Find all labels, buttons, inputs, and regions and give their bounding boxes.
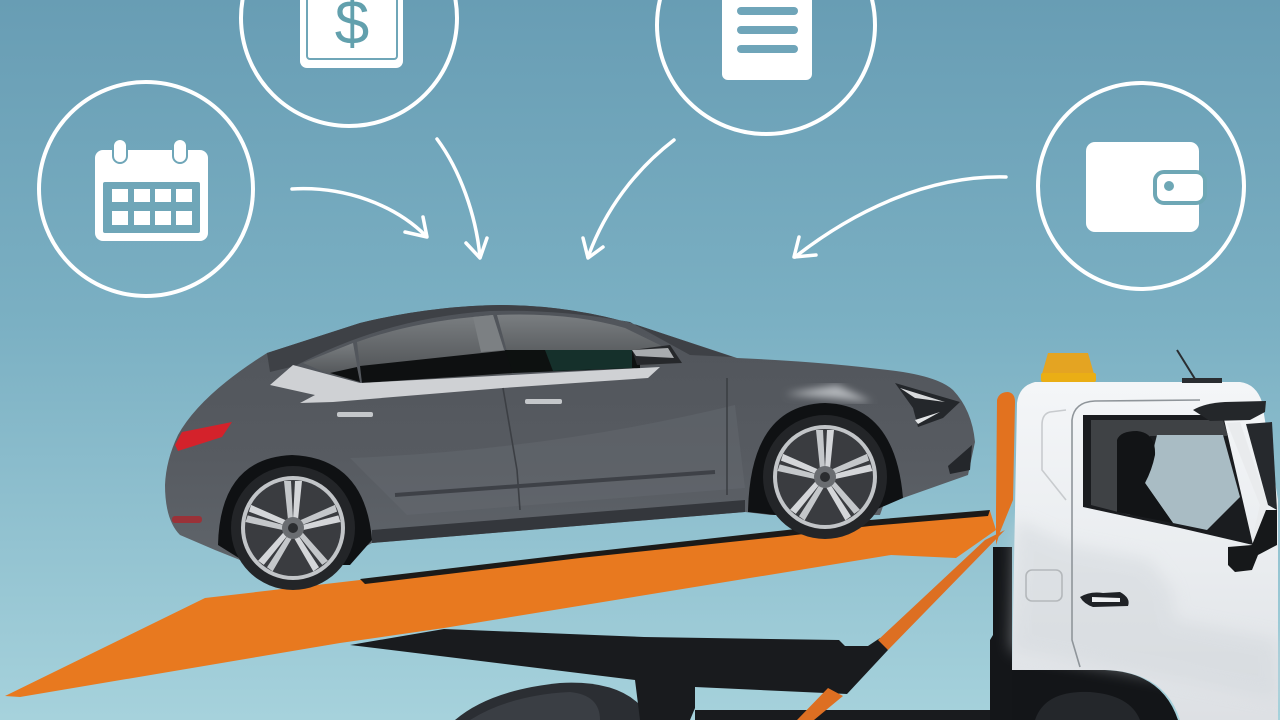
tow truck bed and frame [5,392,1015,720]
rear wheel [231,466,355,590]
wheel arch [1012,670,1178,720]
roof dark band [267,305,733,372]
car body [165,305,975,560]
arrow: from wallet [794,177,1006,257]
lift arm [350,629,888,720]
truck cab [990,350,1278,720]
icon: document circle [657,0,875,134]
driver [1117,431,1173,523]
door line [1072,400,1200,667]
car [165,305,975,590]
front wheel arch [748,403,903,515]
beacon [1041,353,1096,382]
arrow: from dollar [437,139,487,258]
cab window with driver [1083,415,1253,545]
windows [303,315,680,383]
orange strut [878,530,1005,650]
pillar [1227,422,1268,543]
handles [337,412,373,417]
upper mirror [1193,401,1266,421]
vertical orange post [996,392,1015,545]
door handle [1080,592,1129,607]
front wheel [763,415,887,539]
arrow: from calendar [292,189,427,237]
silver trim [270,365,660,403]
icon: wallet circle [1038,83,1244,289]
lower mirror [1228,510,1277,572]
fender highlight [785,385,872,402]
icon: calendar circle [39,82,253,296]
rear door window [357,315,512,383]
body shading [1012,520,1278,700]
fuel cap [1026,570,1062,601]
mirror [632,345,682,365]
windshield [1246,422,1277,510]
arrow: from document [583,140,674,258]
rear quarter window [303,343,360,382]
door details [503,378,727,510]
icon: dollar document circle [241,0,457,126]
rear wheel arch [218,455,372,565]
rear wheel of truck [455,683,640,720]
arrows [292,139,1006,258]
grille [948,445,972,474]
antenna [1177,350,1222,383]
ramp [5,511,996,697]
side panel [1042,410,1066,500]
tail light [175,422,232,451]
headlight [895,383,960,427]
front door window [497,315,680,373]
sill shadow [372,500,745,543]
lower door highlight [350,405,745,515]
